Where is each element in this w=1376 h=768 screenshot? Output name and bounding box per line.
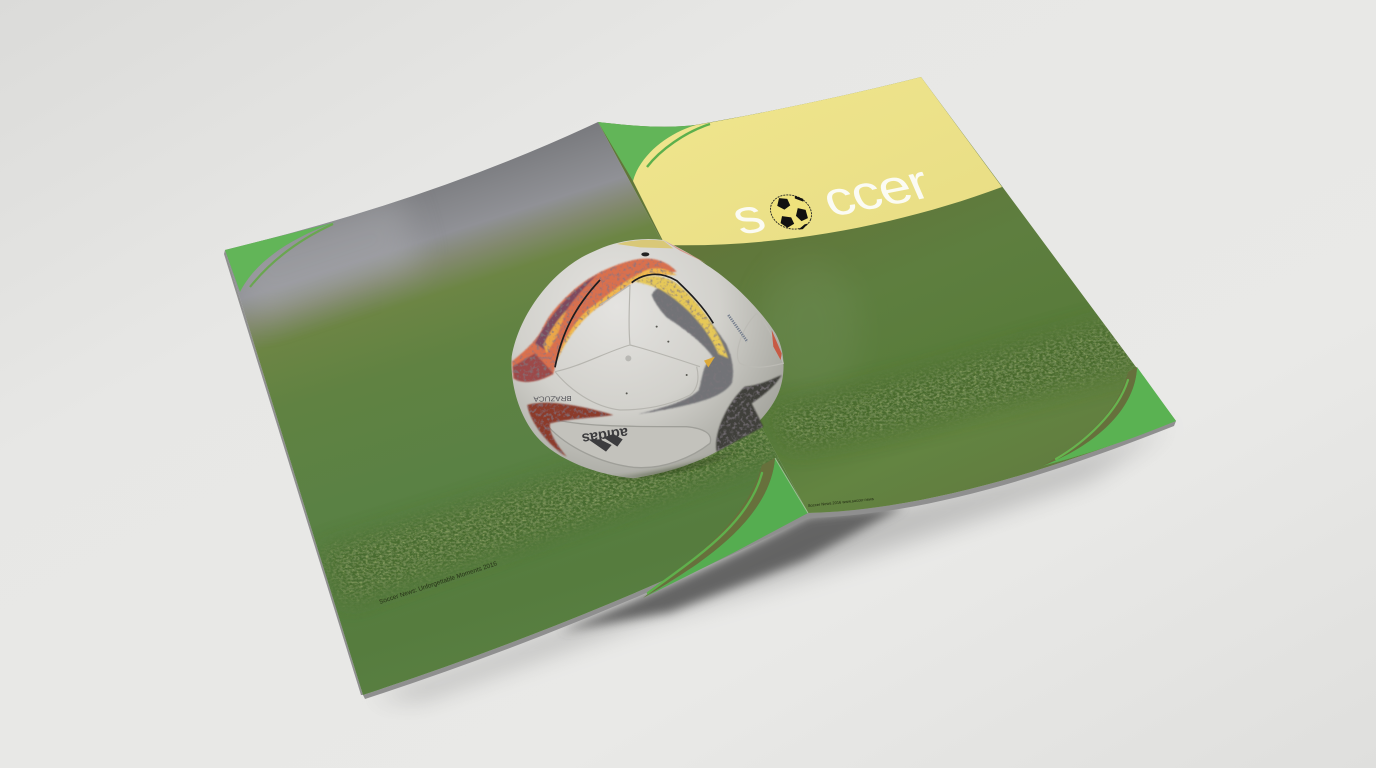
icon: soccer ball: [766, 189, 816, 235]
brochure mockup scene: [0, 0, 1176, 706]
title: soccer: soccer: [723, 155, 937, 245]
swoosh line: top left: [250, 224, 333, 287]
ball body: [511, 239, 784, 478]
left page: back cover: [215, 122, 808, 695]
white panel seams: [555, 285, 700, 410]
swoosh line: bottom right: [648, 473, 762, 593]
green corner: bottom right: [643, 458, 808, 598]
olive crescent: bottom right: [643, 458, 775, 598]
photo subject: soccer ball spanning both pages: [511, 239, 784, 478]
red lower graphic: [527, 403, 613, 457]
yellow title band: [633, 77, 1002, 245]
yellow stripes: [635, 276, 728, 358]
light haze right of ball: [784, 287, 836, 373]
adidas stripes: [588, 434, 623, 452]
small print: back cover: Soccer News: Unforgettable Moments 2016: [378, 560, 498, 606]
dirt specks: [625, 326, 688, 394]
lower grey panel seams: [548, 420, 711, 468]
swoosh line: bottom right: [1056, 380, 1128, 459]
ball dot: [641, 252, 649, 256]
ball print: name: BRAZUCA: [532, 394, 572, 403]
green corner: top left: [225, 222, 336, 292]
olive crescent: bottom right: [1042, 367, 1137, 466]
photo background: blurred grass: [598, 77, 1176, 513]
pale haze over grey stands: [228, 200, 418, 324]
spine crease highlight: [775, 458, 808, 513]
right arch graphic: grey mesh: [638, 285, 733, 414]
left arch graphic: red and orange: [512, 259, 677, 382]
green corner: bottom right: [1042, 367, 1176, 466]
small print: front cover: Soccer News 2016 www.soccer.news: [808, 496, 874, 508]
ball contact shadow: [600, 440, 775, 479]
black seam curves: [555, 274, 713, 367]
photo background: grass and blurred grey stands: [225, 122, 808, 695]
swoosh line: top left: [647, 124, 710, 167]
grass texture band: [770, 318, 1145, 448]
green corner: top left: [598, 122, 696, 181]
cast shadow beneath brochure: [370, 425, 1172, 700]
shadowed section past spine: [716, 375, 782, 452]
red mark right side: [772, 330, 782, 360]
right page: front cover: [598, 77, 1176, 513]
page edge thickness: [224, 250, 1176, 699]
blue print right side: [728, 315, 747, 342]
ball print: adidas: adidas: [581, 424, 629, 446]
top yellow graphic: [617, 240, 673, 248]
grass texture band: [320, 428, 778, 602]
